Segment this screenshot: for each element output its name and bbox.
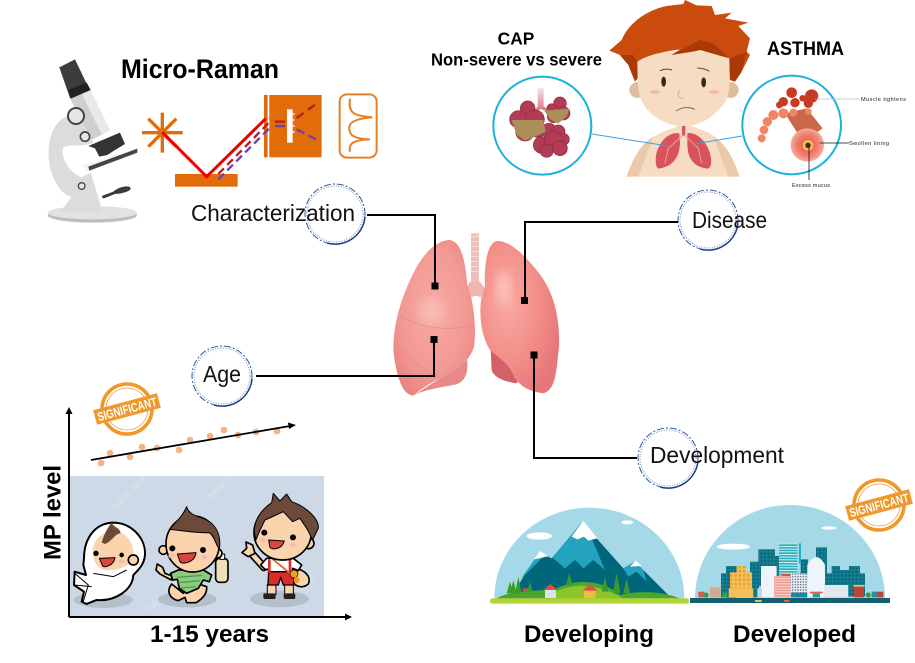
connector: disease to lung bbox=[521, 222, 678, 304]
label: Muscle tightens bbox=[815, 97, 906, 103]
panel: disease bbox=[431, 0, 906, 189]
stamp: significant bbox=[93, 384, 161, 434]
icon: Raman spectrum bbox=[340, 94, 377, 158]
boy bbox=[250, 552, 264, 567]
label: Excess mucus bbox=[792, 147, 830, 189]
label: Developed: Developed bbox=[733, 621, 856, 648]
callout: alveoli bbox=[493, 77, 591, 175]
image backdrop: children bbox=[70, 476, 324, 617]
label: Characterization: Characterization bbox=[191, 200, 355, 226]
axis label: MP level: MP level bbox=[40, 465, 66, 560]
label: Swollen lining: Swollen lining bbox=[849, 141, 889, 147]
connector: alveoli callout line bbox=[592, 134, 668, 146]
connector: age to lung bbox=[256, 336, 438, 376]
panel: age chart bbox=[40, 384, 352, 648]
watermark text: Adobe Stock bbox=[145, 574, 184, 613]
label: Muscle tightens: Muscle tightens bbox=[861, 97, 906, 103]
connector: airway callout line bbox=[694, 136, 742, 144]
illustration: developed city bbox=[690, 505, 890, 603]
watermark text bbox=[110, 462, 319, 613]
subheading: Non-severe vs severe: Non-severe vs severe bbox=[431, 50, 602, 70]
baby one bbox=[74, 523, 145, 604]
watermark text: Adobe Stock bbox=[280, 572, 319, 611]
heading: Micro-Raman: Micro-Raman bbox=[121, 54, 279, 84]
label: Swollen lining bbox=[820, 141, 889, 147]
label: Disease bbox=[678, 190, 767, 250]
illustration: central lungs bbox=[393, 233, 559, 396]
label: Developing: Developing bbox=[524, 621, 654, 648]
illustration: boy with lungs bbox=[609, 0, 750, 177]
heading: ASTHMA: ASTHMA bbox=[767, 38, 844, 60]
connector: characterization to lung bbox=[367, 215, 438, 290]
label: Characterization bbox=[191, 184, 365, 244]
watermark text: Adobe Stock bbox=[110, 472, 149, 511]
label: Excess mucus: Excess mucus bbox=[792, 183, 830, 189]
illustration: developing landscape bbox=[490, 508, 689, 604]
scatter points bbox=[98, 427, 280, 466]
label: Development bbox=[638, 428, 785, 488]
label: Development: Development bbox=[650, 442, 785, 468]
icon: microscope bbox=[48, 59, 137, 223]
baby two bbox=[169, 583, 207, 603]
callout: asthma airway bbox=[742, 76, 841, 174]
label: Age: Age bbox=[203, 361, 241, 387]
axis label: 1-15 years: 1-15 years bbox=[150, 621, 269, 648]
diagram: laser reflection bbox=[142, 95, 322, 187]
stamp: significant bbox=[845, 480, 913, 530]
chart axes bbox=[66, 407, 352, 620]
panel: Micro-Raman characterization bbox=[48, 54, 377, 223]
illustration: three children bbox=[74, 493, 318, 608]
connector: development to lung bbox=[530, 352, 637, 458]
label: Age bbox=[192, 346, 252, 406]
trend arrow bbox=[91, 422, 296, 460]
heading: CAP: CAP bbox=[498, 29, 534, 49]
watermark text: Adobe Stock bbox=[205, 462, 244, 501]
label: Disease: Disease bbox=[692, 207, 767, 233]
panel: development bbox=[490, 480, 913, 648]
